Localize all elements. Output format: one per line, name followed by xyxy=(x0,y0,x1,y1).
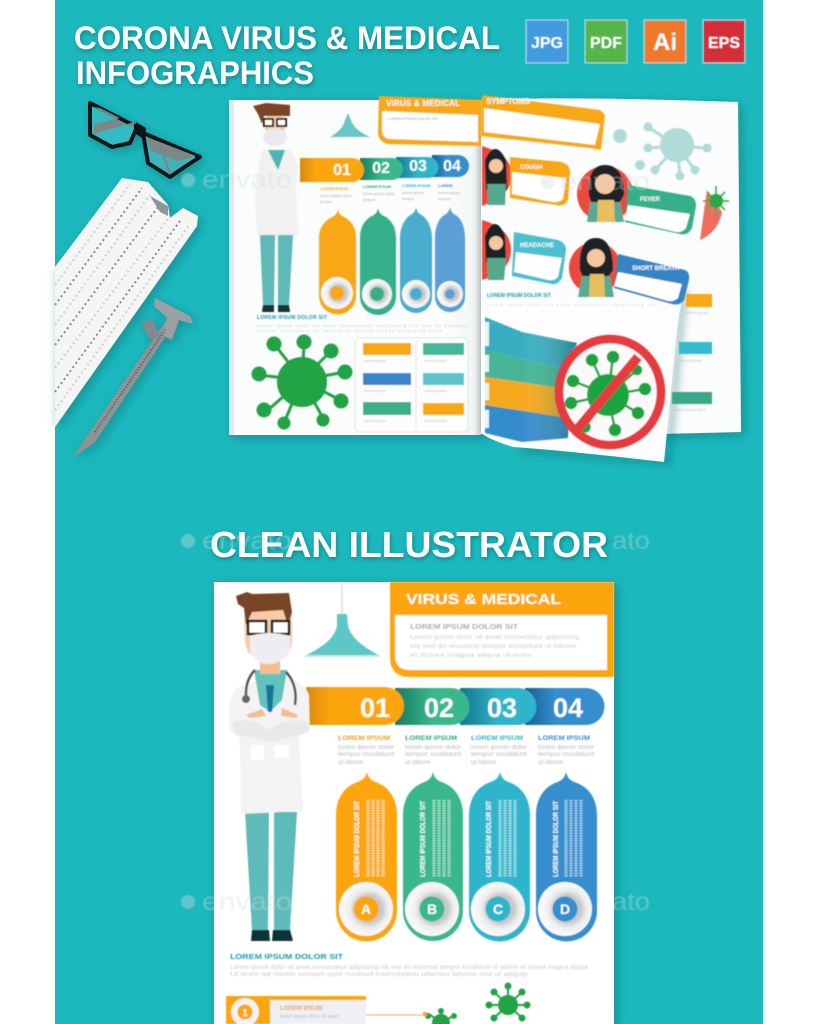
footer body: Lorem ipsum dolor sit amet consectetur adipiscing elit sed do eiusmod tempor incididunt ut labore et dolore magna aliqua xyxy=(230,964,588,971)
magazine column captions: lorem ipsum xyxy=(438,190,460,195)
magazine column captions: tempor xyxy=(363,197,376,202)
pill C: C xyxy=(493,901,503,917)
badge: PDF xyxy=(585,20,627,63)
pill D: D xyxy=(560,901,570,917)
magazine table panel: lorem ipsum xyxy=(364,388,386,393)
magazine column captions: lorem ipsum dolor xyxy=(363,191,395,196)
pill B: B xyxy=(427,901,437,917)
callout green: FEVER xyxy=(640,197,661,203)
badge: Ai: Ai xyxy=(653,29,677,56)
magazine ribbon: 01 xyxy=(333,162,351,179)
label green xyxy=(423,343,464,355)
callout teal xyxy=(512,232,566,284)
magazine table panel: lorem ipsum xyxy=(425,388,447,393)
icon: caliper xyxy=(72,298,193,458)
magazine column captions: lorem ipsum xyxy=(402,190,424,195)
magazine ribbon: 04 xyxy=(443,158,461,175)
magazine orange header box left: VIRUS & MEDICAL xyxy=(386,99,460,108)
neck xyxy=(260,660,280,674)
magazine column captions: tempor xyxy=(438,196,451,201)
caption 1: ut labore xyxy=(338,759,364,766)
caption 4: ut labore xyxy=(538,759,564,766)
pill D xyxy=(536,772,597,941)
right page footer text xyxy=(487,293,658,307)
segment 01 xyxy=(306,687,404,725)
caption 3: lorem ipsum dolor xyxy=(471,744,528,751)
badge: JPG: JPG xyxy=(531,35,563,52)
right page side tabs xyxy=(672,294,712,412)
caption 3 xyxy=(471,735,528,766)
file format badges xyxy=(526,20,745,63)
band blue xyxy=(485,405,568,442)
band side nodes xyxy=(485,322,489,428)
header subtitle: LOREM IPSUM DOLOR SIT xyxy=(410,622,518,631)
icon: prohibited virus sign xyxy=(559,339,661,445)
magazine footer text: tempor incididunt ut labore et dolore magna aliqua ut enim xyxy=(257,328,443,333)
woman 1 xyxy=(482,146,512,206)
ribbon numbers xyxy=(360,693,583,723)
doctor figure xyxy=(229,592,310,941)
pill C xyxy=(469,772,530,941)
magazine table panel: lorem ipsum xyxy=(425,418,447,423)
sign slash xyxy=(575,357,638,432)
label teal xyxy=(423,373,464,385)
tab green xyxy=(672,392,712,404)
eyeglasses xyxy=(248,621,289,634)
magazine column captions: tempor xyxy=(402,196,415,201)
header body text: elit sed do eiusmod tempor incididunt ut labore xyxy=(410,643,576,650)
pill A xyxy=(336,772,397,941)
magazine footer text: lorem ipsum dolor sit amet consectetur adipiscing elit sed do eiusmod xyxy=(257,323,467,328)
magazine ribbon: 03 xyxy=(409,158,427,175)
badge: PDF: PDF xyxy=(590,35,622,52)
caption 4 xyxy=(538,735,595,766)
magazine column captions: LOREM IPSUM xyxy=(402,183,431,188)
label blue xyxy=(363,373,411,385)
footer body xyxy=(230,964,588,978)
magazine column captions: LOREM IPSUM xyxy=(363,184,392,189)
magazine orange header box left xyxy=(378,96,481,146)
caption 4: LOREM IPSUM xyxy=(538,735,590,742)
segment 04 xyxy=(525,688,604,725)
sign virus xyxy=(566,352,650,435)
face xyxy=(244,610,292,660)
pill C: LOREM IPSUM DOLOR SIT xyxy=(486,800,493,877)
caption 4: lorem ipsum dolor xyxy=(538,744,595,751)
ribbon numbers: 02 xyxy=(424,693,454,723)
callout green xyxy=(625,185,696,234)
doctor head xyxy=(264,113,286,135)
envato watermarks: envato xyxy=(202,888,292,916)
band shading xyxy=(522,332,577,442)
pill B xyxy=(403,772,463,941)
caption 2: tempor incididunt xyxy=(405,751,461,758)
medium virus xyxy=(486,984,530,1020)
header body text: et dolore magna aliqua ut enim xyxy=(410,652,532,659)
segment 02 xyxy=(395,688,470,725)
icon: eyeglasses xyxy=(90,103,200,177)
tab teal xyxy=(679,342,712,354)
footer heading: LOREM IPSUM DOLOR SIT xyxy=(230,952,343,961)
pill B xyxy=(360,208,396,315)
magazine ribbon: 02 xyxy=(372,160,390,177)
caption 1 xyxy=(338,735,395,766)
bottom orange card xyxy=(226,996,366,1024)
doctor hair xyxy=(253,103,290,124)
pill A: LOREM IPSUM DOLOR SIT xyxy=(354,800,361,877)
ribbon numbers: 03 xyxy=(487,693,517,723)
band teal xyxy=(485,317,577,368)
caption 2: lorem ipsum dolor xyxy=(405,744,462,751)
pill C xyxy=(400,207,432,313)
caption 1: tempor incididunt xyxy=(338,751,394,758)
lab coat xyxy=(229,678,310,814)
label orange 2 xyxy=(423,403,464,415)
column captions xyxy=(338,735,595,766)
number ribbon xyxy=(306,687,604,725)
small virus xyxy=(423,1009,456,1024)
caption 3: tempor incididunt xyxy=(471,751,527,758)
badge: JPG xyxy=(526,20,568,63)
magazine column captions: LOREM xyxy=(438,183,453,188)
tab orange xyxy=(686,294,712,307)
poster header panel xyxy=(390,582,614,677)
caption 4: tempor incididunt xyxy=(538,751,594,758)
ribbon numbers: 04 xyxy=(553,693,583,723)
band orange xyxy=(485,377,560,417)
bottom orange card: 1 xyxy=(242,1008,248,1019)
magazine orange header box right: SYMPTOMS xyxy=(486,97,531,106)
caption 2 xyxy=(405,735,462,766)
pill A: A xyxy=(361,901,371,917)
magazine column captions xyxy=(320,183,460,204)
magazine: left page xyxy=(229,100,481,435)
caption 3: LOREM IPSUM xyxy=(471,735,523,742)
doctor shoes xyxy=(262,305,290,312)
heading: clean illustrator: CLEAN ILLUSTRATOR xyxy=(210,524,608,565)
callout blue: SHORT BREATH xyxy=(632,266,679,272)
magazine table panel: lorem ipsum xyxy=(364,358,386,363)
hair xyxy=(236,592,292,625)
bottom orange card: lorem ipsum dolor sit amet xyxy=(280,1014,339,1020)
header body text: Lorem ipsum dolor sit amet consectetur adipiscing xyxy=(410,634,579,641)
magazine footer text: LOREM IPSUM DOLOR SIT xyxy=(257,315,327,321)
magazine: right page xyxy=(481,98,741,434)
band green xyxy=(485,350,560,388)
doctor coat xyxy=(255,150,298,236)
coat pockets xyxy=(251,745,289,760)
pill B: LOREM IPSUM DOLOR SIT xyxy=(420,800,427,877)
colored band stack on curled page xyxy=(485,317,577,442)
label orange xyxy=(363,343,411,355)
pill D xyxy=(435,207,465,312)
callout orange: COUGH xyxy=(520,165,542,171)
envato watermarks: ato xyxy=(612,888,650,916)
title xyxy=(74,20,500,91)
faint virus top right xyxy=(613,124,710,179)
callout blue xyxy=(614,254,689,304)
callout teal: HEADACHE xyxy=(520,243,554,249)
connector line xyxy=(366,1014,426,1016)
rolled blueprint tubes xyxy=(55,178,198,427)
magazine table panel xyxy=(355,338,468,432)
magazine table panel: lorem ipsum xyxy=(364,418,386,423)
magazine ribbon xyxy=(300,155,469,182)
magazine orange header box left: LOREM IPSUM DOLOR SIT xyxy=(388,116,439,121)
ribbon numbers: 01 xyxy=(360,693,390,723)
necktie xyxy=(266,685,274,712)
magazine orange header box right xyxy=(481,95,605,150)
folded arms xyxy=(232,720,309,742)
footer text block xyxy=(230,952,588,978)
face mask xyxy=(250,633,290,664)
hands xyxy=(246,708,298,718)
title: CORONA VIRUS & MEDICAL xyxy=(74,20,500,56)
title: INFOGRAPHICS xyxy=(76,55,314,91)
doctor glasses xyxy=(264,119,286,126)
badge: Ai xyxy=(644,20,686,63)
magazine column captions: lorem ipsum dolor xyxy=(320,193,352,198)
icon: large green virus xyxy=(253,336,351,428)
label dark green xyxy=(363,402,411,415)
lamp xyxy=(305,582,380,657)
magazine column captions: LOREM IPSUM xyxy=(320,186,349,191)
caption 3: ut labore xyxy=(471,759,497,766)
magazine small doctor xyxy=(253,103,298,312)
header title: VIRUS & MEDICAL xyxy=(406,591,561,608)
left lens xyxy=(90,103,137,147)
magazine table panel: lorem ipsum xyxy=(425,358,447,363)
right page side tabs: lorem ipsum dolor xyxy=(674,407,706,412)
right page footer text: LOREM IPSUM DOLOR SIT xyxy=(487,293,551,299)
red figure and green virus at page edge xyxy=(700,186,729,240)
woman 3 xyxy=(482,220,511,280)
envato watermarks: envato xyxy=(560,168,650,196)
pill D: LOREM IPSUM DOLOR SIT xyxy=(553,800,560,877)
envato watermarks: envato xyxy=(202,527,292,555)
woman 4 xyxy=(569,238,621,297)
shoes xyxy=(251,930,293,941)
caption 2: LOREM IPSUM xyxy=(405,735,457,742)
badge: EPS xyxy=(703,20,745,63)
shirt collar xyxy=(254,670,287,712)
pills A-D xyxy=(336,772,597,941)
right lens xyxy=(143,133,200,177)
magazine column captions: tempor xyxy=(320,199,333,204)
spine shading xyxy=(445,100,481,435)
doctor mask xyxy=(263,128,287,146)
envato watermarks: envato xyxy=(202,166,292,194)
lens reflections xyxy=(94,107,196,161)
envato watermarks xyxy=(181,166,650,916)
right page footer text: lorem ipsum dolor sit amet consectetur adipiscing elit xyxy=(487,302,658,307)
woman 2 xyxy=(577,165,633,222)
right page side tabs: lorem ipsum xyxy=(680,358,702,363)
header body text xyxy=(410,634,579,659)
magazine footer text xyxy=(257,315,467,333)
right page side tabs: lorem ipsum xyxy=(686,310,708,315)
badge: EPS: EPS xyxy=(708,35,740,52)
envato watermarks: ato xyxy=(612,527,650,555)
pill A xyxy=(319,209,356,314)
segment 03 xyxy=(460,688,536,725)
magazine pills xyxy=(319,207,465,315)
callout orange xyxy=(510,157,570,205)
caption 1: lorem ipsum dolor xyxy=(338,744,395,751)
stethoscope xyxy=(246,670,296,705)
footer body: Ut enim ad minim veniam quis nostrud exercitation ullamco laboris nisi ut aliquip xyxy=(230,971,528,978)
trousers xyxy=(245,812,297,930)
doctor collar and tie xyxy=(268,150,285,170)
caption 2: ut labore xyxy=(405,759,431,766)
curled page shadow xyxy=(520,290,684,462)
magazine lamp xyxy=(330,113,370,137)
caption 1: LOREM IPSUM xyxy=(338,735,390,742)
bottom orange card: LOREM IPSUM xyxy=(280,1006,322,1012)
bridge xyxy=(136,122,146,140)
doctor legs xyxy=(260,235,293,305)
magazine: curled page xyxy=(481,290,684,462)
poster page xyxy=(214,582,614,1024)
